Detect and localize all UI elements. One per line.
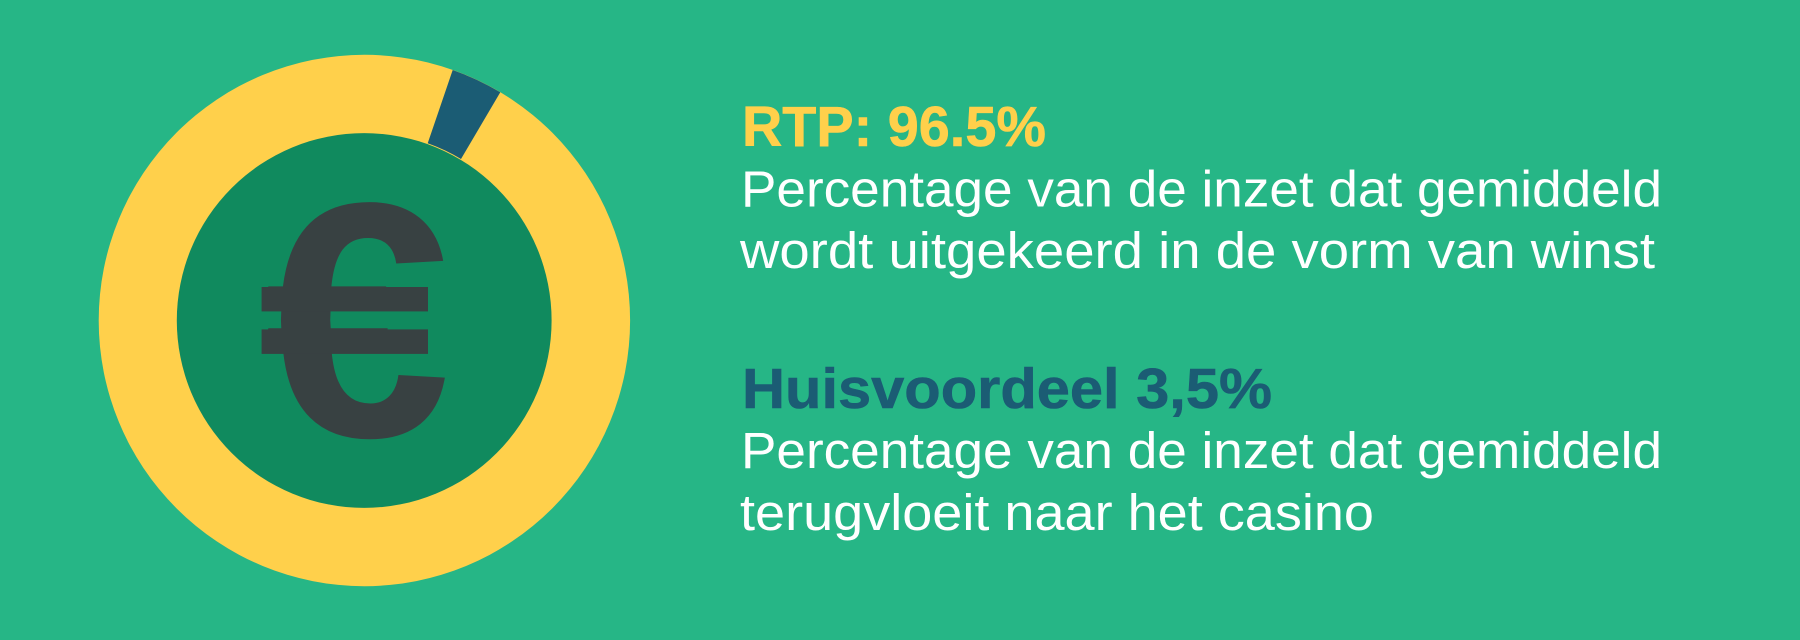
icon: euro sign: € bbox=[260, 133, 451, 507]
text block: house edge bbox=[740, 357, 1662, 541]
donut segment: RTP 96.5% bbox=[99, 55, 630, 586]
text block: RTP bbox=[739, 95, 1662, 279]
description: RTP: Percentage van de inzet dat gemiddeld bbox=[741, 160, 1662, 218]
heading: Huisvoordeel: Huisvoordeel 3,5% bbox=[742, 357, 1272, 421]
donut centre bbox=[177, 133, 552, 508]
description: house edge bbox=[740, 422, 1662, 541]
donut segment: house edge 3.5% bbox=[428, 70, 500, 159]
heading: RTP: RTP: 96.5% bbox=[742, 95, 1046, 159]
description: RTP: wordt uitgekeerd in de vorm van winst bbox=[739, 222, 1655, 279]
description: house edge: Percentage van de inzet dat gemiddeld bbox=[741, 422, 1662, 479]
donut chart: RTP vs house edge bbox=[99, 55, 630, 586]
description: RTP bbox=[739, 160, 1662, 279]
description: house edge: terugvloeit naar het casino bbox=[740, 484, 1374, 541]
